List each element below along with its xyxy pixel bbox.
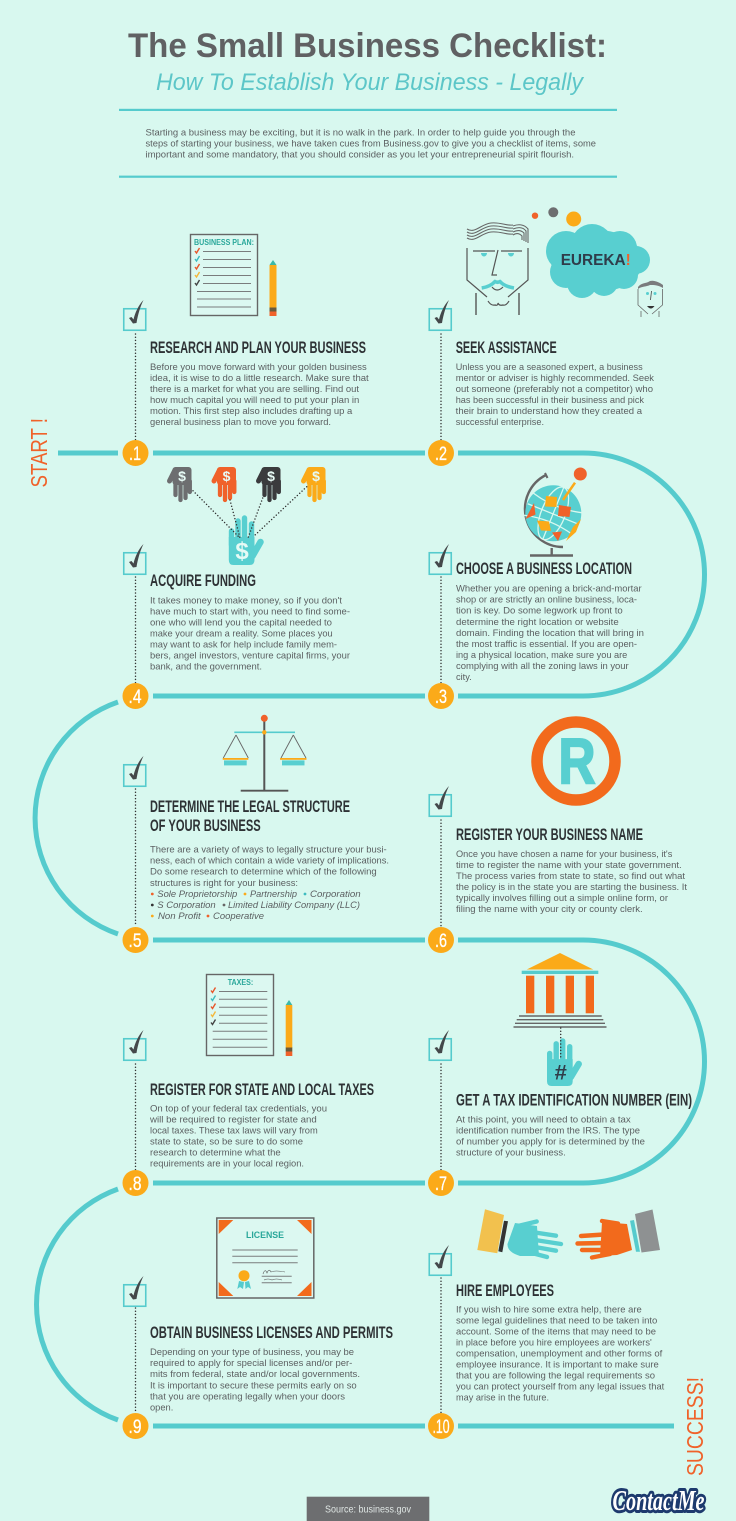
number 2 bbox=[428, 440, 454, 466]
body 5 bbox=[150, 844, 389, 888]
body 8: On top of your federal tax credentials, you bbox=[150, 1102, 327, 1113]
number 7 bbox=[428, 1170, 454, 1196]
body 5: ness, each of which contain a wide variety of implications. bbox=[150, 855, 389, 866]
body 1: general business plan to move you forward. bbox=[150, 416, 331, 427]
step 6 bbox=[428, 786, 687, 953]
body 9: It is important to secure these permits early on so bbox=[150, 1379, 357, 1390]
heading 9: OBTAIN BUSINESS LICENSES AND PERMITS bbox=[150, 1324, 393, 1342]
left sleeve and hand bbox=[477, 1209, 561, 1257]
body 2: out someone (preferably not a competitor) who bbox=[456, 383, 653, 394]
icon: big face bbox=[467, 223, 528, 315]
body 7: of number you apply for is determined by the bbox=[456, 1136, 645, 1147]
body 8: local taxes. These tax laws will vary from bbox=[150, 1125, 318, 1136]
body 3 bbox=[456, 583, 644, 682]
icon: taxes document bbox=[206, 974, 274, 1056]
number 6: .6 bbox=[435, 931, 447, 952]
body 10: that you are following the legal requirements so bbox=[456, 1369, 655, 1380]
number 9: .9 bbox=[128, 1417, 142, 1438]
number 8 bbox=[122, 1170, 148, 1196]
icon: eureka cloud bbox=[546, 224, 650, 298]
heading 3: CHOOSE A BUSINESS LOCATION bbox=[456, 560, 632, 578]
number 8: .8 bbox=[128, 1174, 142, 1195]
step 2 bbox=[428, 300, 654, 466]
list of business structures: Partnership bbox=[250, 888, 297, 899]
body 8 bbox=[149, 1102, 327, 1169]
body 6 bbox=[456, 848, 687, 914]
number 3: .3 bbox=[435, 687, 447, 708]
number 5: .5 bbox=[128, 931, 142, 952]
checkbox 1 bbox=[124, 300, 146, 330]
body 5: structures is right for your business: bbox=[150, 877, 298, 888]
body 6: Once you have chosen a name for your business, it's bbox=[456, 848, 673, 859]
body 9: that you are operating legally when your doors bbox=[150, 1390, 345, 1401]
icon: hand with number sign bbox=[547, 1041, 579, 1086]
hand: yellow bbox=[304, 467, 326, 500]
body 9: mits from federal, state and/or local governments. bbox=[150, 1368, 360, 1379]
heading 5: DETERMINE THE LEGAL STRUCTURE bbox=[150, 798, 350, 816]
hand: orange bbox=[214, 467, 236, 500]
number 7: .7 bbox=[435, 1174, 447, 1195]
body 8: requirements are in your local region. bbox=[150, 1158, 304, 1169]
icon: license certificate: LICENSE bbox=[246, 1230, 284, 1241]
number 1: .1 bbox=[129, 444, 141, 465]
body 3: city. bbox=[456, 671, 472, 682]
list of business structures bbox=[151, 888, 361, 921]
icon: registered mark: R bbox=[558, 726, 596, 798]
checkbox 5 bbox=[124, 756, 146, 786]
success label: SUCCESS! bbox=[682, 1377, 708, 1476]
body 1 bbox=[150, 361, 369, 427]
icon: business plan document bbox=[190, 234, 258, 316]
body 8: research to determine what the bbox=[150, 1147, 281, 1158]
body 4: It takes money to make money, so if you don't bbox=[150, 594, 342, 605]
step 8 bbox=[122, 1030, 374, 1196]
body 7: identification number from the IRS. The type bbox=[456, 1125, 640, 1136]
intro text: Starting a business may be exciting, but it is no walk in the park. In order to help guide you through the bbox=[146, 126, 576, 138]
number 2: .2 bbox=[435, 444, 447, 465]
hand: teal receiving: $ bbox=[235, 538, 249, 565]
icon: small face bbox=[638, 281, 663, 317]
icon: license certificate bbox=[217, 1218, 314, 1298]
icon: globe bbox=[517, 468, 590, 556]
body 3: Whether you are opening a brick-and-mortar bbox=[456, 583, 642, 594]
icon: hand with number sign: # bbox=[555, 1060, 567, 1084]
body 1: idea, it is wise to do a little research. Make sure that bbox=[150, 372, 369, 383]
dotted link building to hand bbox=[560, 1028, 562, 1060]
body 9: open. bbox=[150, 1401, 173, 1412]
body 3: shop or are strictly an online business, loca- bbox=[456, 594, 637, 605]
hand: dark bbox=[258, 467, 280, 500]
source bar: Source: business.gov bbox=[325, 1504, 411, 1515]
icon: funding hands bbox=[170, 467, 326, 565]
hand: gray: $ bbox=[178, 468, 186, 484]
number 4 bbox=[122, 683, 148, 709]
body 9 bbox=[150, 1346, 360, 1412]
path track bbox=[35, 453, 705, 1426]
step 10 bbox=[428, 1245, 665, 1439]
body 8: will be required to register for state and bbox=[149, 1114, 317, 1125]
step 1 bbox=[122, 300, 369, 466]
checkbox 7 bbox=[429, 1030, 451, 1060]
body 10: compensation, unemployment and other forms of bbox=[456, 1347, 663, 1358]
step 9 bbox=[122, 1276, 393, 1439]
body 4: have much to start with, you need to find some- bbox=[150, 605, 350, 616]
step 4 bbox=[122, 544, 350, 709]
checkbox 4 bbox=[124, 544, 146, 574]
checkbox 6 bbox=[429, 786, 451, 816]
checkbox 3 bbox=[429, 544, 451, 574]
body 6: the policy is in the state you are starting the business. It bbox=[456, 881, 687, 892]
list of business structures: Non Profit bbox=[158, 910, 201, 921]
heading 1: RESEARCH AND PLAN YOUR BUSINESS bbox=[150, 339, 366, 357]
body 2: successful enterprise. bbox=[456, 416, 544, 427]
body 6: time to register the name with your state government. bbox=[456, 859, 682, 870]
icon: handshake bbox=[477, 1209, 660, 1258]
hand: teal receiving bbox=[229, 518, 260, 565]
heading 5: OF YOUR BUSINESS bbox=[150, 817, 261, 835]
body 4: bers, angel investors, venture capital firms, your bbox=[150, 650, 350, 661]
body 1: Before you move forward with your golden business bbox=[150, 361, 367, 372]
number 3 bbox=[428, 683, 454, 709]
body 10: may arise in the future. bbox=[456, 1391, 549, 1402]
checkbox 9 bbox=[124, 1276, 146, 1306]
subtitle: How To Establish Your Business - Legally bbox=[156, 69, 585, 96]
checkbox 2 bbox=[429, 300, 451, 330]
number 6 bbox=[428, 927, 454, 953]
number 1 bbox=[122, 440, 148, 466]
title: The Small Business Checklist: bbox=[128, 27, 607, 65]
body 10 bbox=[456, 1303, 665, 1402]
number 10 bbox=[428, 1413, 454, 1439]
number 10: .10 bbox=[432, 1417, 450, 1438]
body 7: structure of your business. bbox=[456, 1147, 566, 1158]
source bar bbox=[307, 1497, 429, 1521]
body 4: may want to ask for help include family mem- bbox=[150, 639, 337, 650]
intro text bbox=[146, 126, 596, 160]
dotted connectors bbox=[136, 334, 441, 1413]
body 10: in place before you hire employees are workers' bbox=[456, 1336, 652, 1347]
number 9 bbox=[122, 1413, 148, 1439]
icon: eureka cloud: EUREKA! bbox=[561, 252, 631, 269]
number 5 bbox=[122, 927, 148, 953]
right sleeve and hand bbox=[578, 1210, 660, 1258]
hand: gray bbox=[170, 467, 192, 500]
icon: pencil bbox=[270, 260, 276, 316]
body 10: some legal guidelines that need to be taken into bbox=[456, 1314, 657, 1325]
body 3: complying with all the zoning laws in your bbox=[456, 660, 629, 671]
intro text: steps of starting your business, we have taken cues from Business.gov to give you a checklist of items, some bbox=[146, 138, 596, 148]
list of business structures: Cooperative bbox=[213, 910, 264, 921]
body 10: employee insurance. It is important to make sure bbox=[456, 1358, 659, 1369]
body 4: make your dream a reality. Some places you bbox=[150, 628, 333, 639]
body 2: has been successful in their business and pick bbox=[456, 394, 644, 405]
start label: START ! bbox=[26, 418, 52, 488]
heading 5 bbox=[150, 798, 350, 835]
icon: government building bbox=[514, 953, 606, 1027]
body 3: domain. Finding the location that will bring in bbox=[456, 627, 644, 638]
heading 10: HIRE EMPLOYEES bbox=[456, 1282, 554, 1300]
body 7: At this point, you will need to obtain a tax bbox=[456, 1114, 631, 1125]
body 3: tion is key. Do some legwork up front to bbox=[456, 605, 623, 616]
body 3: determine the right location or website bbox=[456, 616, 619, 627]
body 2 bbox=[456, 361, 654, 427]
icon: registered mark bbox=[537, 722, 615, 800]
body 3: the most traffic is essential. If you are open- bbox=[456, 638, 637, 649]
hand: orange: $ bbox=[223, 468, 231, 484]
body 1: motion. This first step also includes drafting up a bbox=[150, 405, 353, 416]
body 4: bank, and the government. bbox=[150, 661, 262, 672]
body 9: Depending on your type of business, you may be bbox=[150, 1346, 354, 1357]
hand: yellow: $ bbox=[312, 468, 320, 484]
intro text: important and some mandatory, that you should consider as you let your entrepreneurial spirit flourish. bbox=[146, 148, 574, 160]
heading 6: REGISTER YOUR BUSINESS NAME bbox=[456, 826, 643, 844]
heading 4: ACQUIRE FUNDING bbox=[150, 572, 256, 590]
body 3: ing a physical location, make sure you are bbox=[456, 649, 627, 660]
body 6: filing the name with your city or county clerk. bbox=[456, 903, 643, 914]
body 1: how much capital you will need to put your plan in bbox=[150, 394, 359, 405]
list of business structures: S Corporation bbox=[157, 899, 216, 910]
heading 8: REGISTER FOR STATE AND LOCAL TAXES bbox=[150, 1081, 374, 1099]
list of business structures: Limited Liability Company (LLC) bbox=[228, 899, 360, 910]
body 8: state to state, so be sure to do some bbox=[150, 1136, 303, 1147]
body 4: one who will lend you the capital needed to bbox=[150, 616, 332, 627]
step 7 bbox=[428, 1030, 692, 1196]
body 4 bbox=[150, 594, 350, 672]
number 4: .4 bbox=[128, 687, 142, 708]
body 6: The process varies from state to state, so find out what bbox=[456, 870, 685, 881]
list of business structures: Corporation bbox=[310, 888, 361, 899]
body 7 bbox=[456, 1114, 645, 1158]
body 2: their brain to understand how they created a bbox=[456, 405, 643, 416]
icon: business plan document: BUSINESS PLAN: bbox=[194, 238, 254, 247]
body 10: you can protect yourself from any legal issues that bbox=[456, 1380, 665, 1391]
list of business structures: Sole Proprietorship bbox=[157, 888, 237, 899]
step 5 bbox=[122, 756, 389, 953]
icon: scales bbox=[223, 715, 306, 791]
body 1: there is a market for what you are selling. Find out bbox=[150, 383, 359, 394]
body 9: required to apply for special licenses and/or per- bbox=[150, 1357, 352, 1368]
checkbox 8 bbox=[124, 1030, 146, 1060]
body 6: typically involves filling out a simple online form, or bbox=[456, 892, 668, 903]
body 2: mentor or adviser is highly recommended. Seek bbox=[456, 372, 654, 383]
icon: thought dots bbox=[532, 207, 581, 226]
body 10: If you wish to hire some extra help, there are bbox=[456, 1303, 642, 1314]
checkbox 10 bbox=[429, 1245, 451, 1275]
body 2: Unless you are a seasoned expert, a business bbox=[456, 361, 643, 372]
body 5: There are a variety of ways to legally structure your busi- bbox=[150, 844, 387, 855]
step 3 bbox=[428, 544, 644, 709]
icon: taxes document: TAXES: bbox=[228, 978, 253, 987]
body 10: account. Some of the items that may need to be bbox=[456, 1325, 656, 1336]
hand: dark: $ bbox=[267, 468, 275, 484]
icon: tax pencil bbox=[286, 1000, 292, 1056]
heading 2: SEEK ASSISTANCE bbox=[456, 339, 557, 357]
body 5: Do some research to determine which of the following bbox=[150, 866, 377, 877]
